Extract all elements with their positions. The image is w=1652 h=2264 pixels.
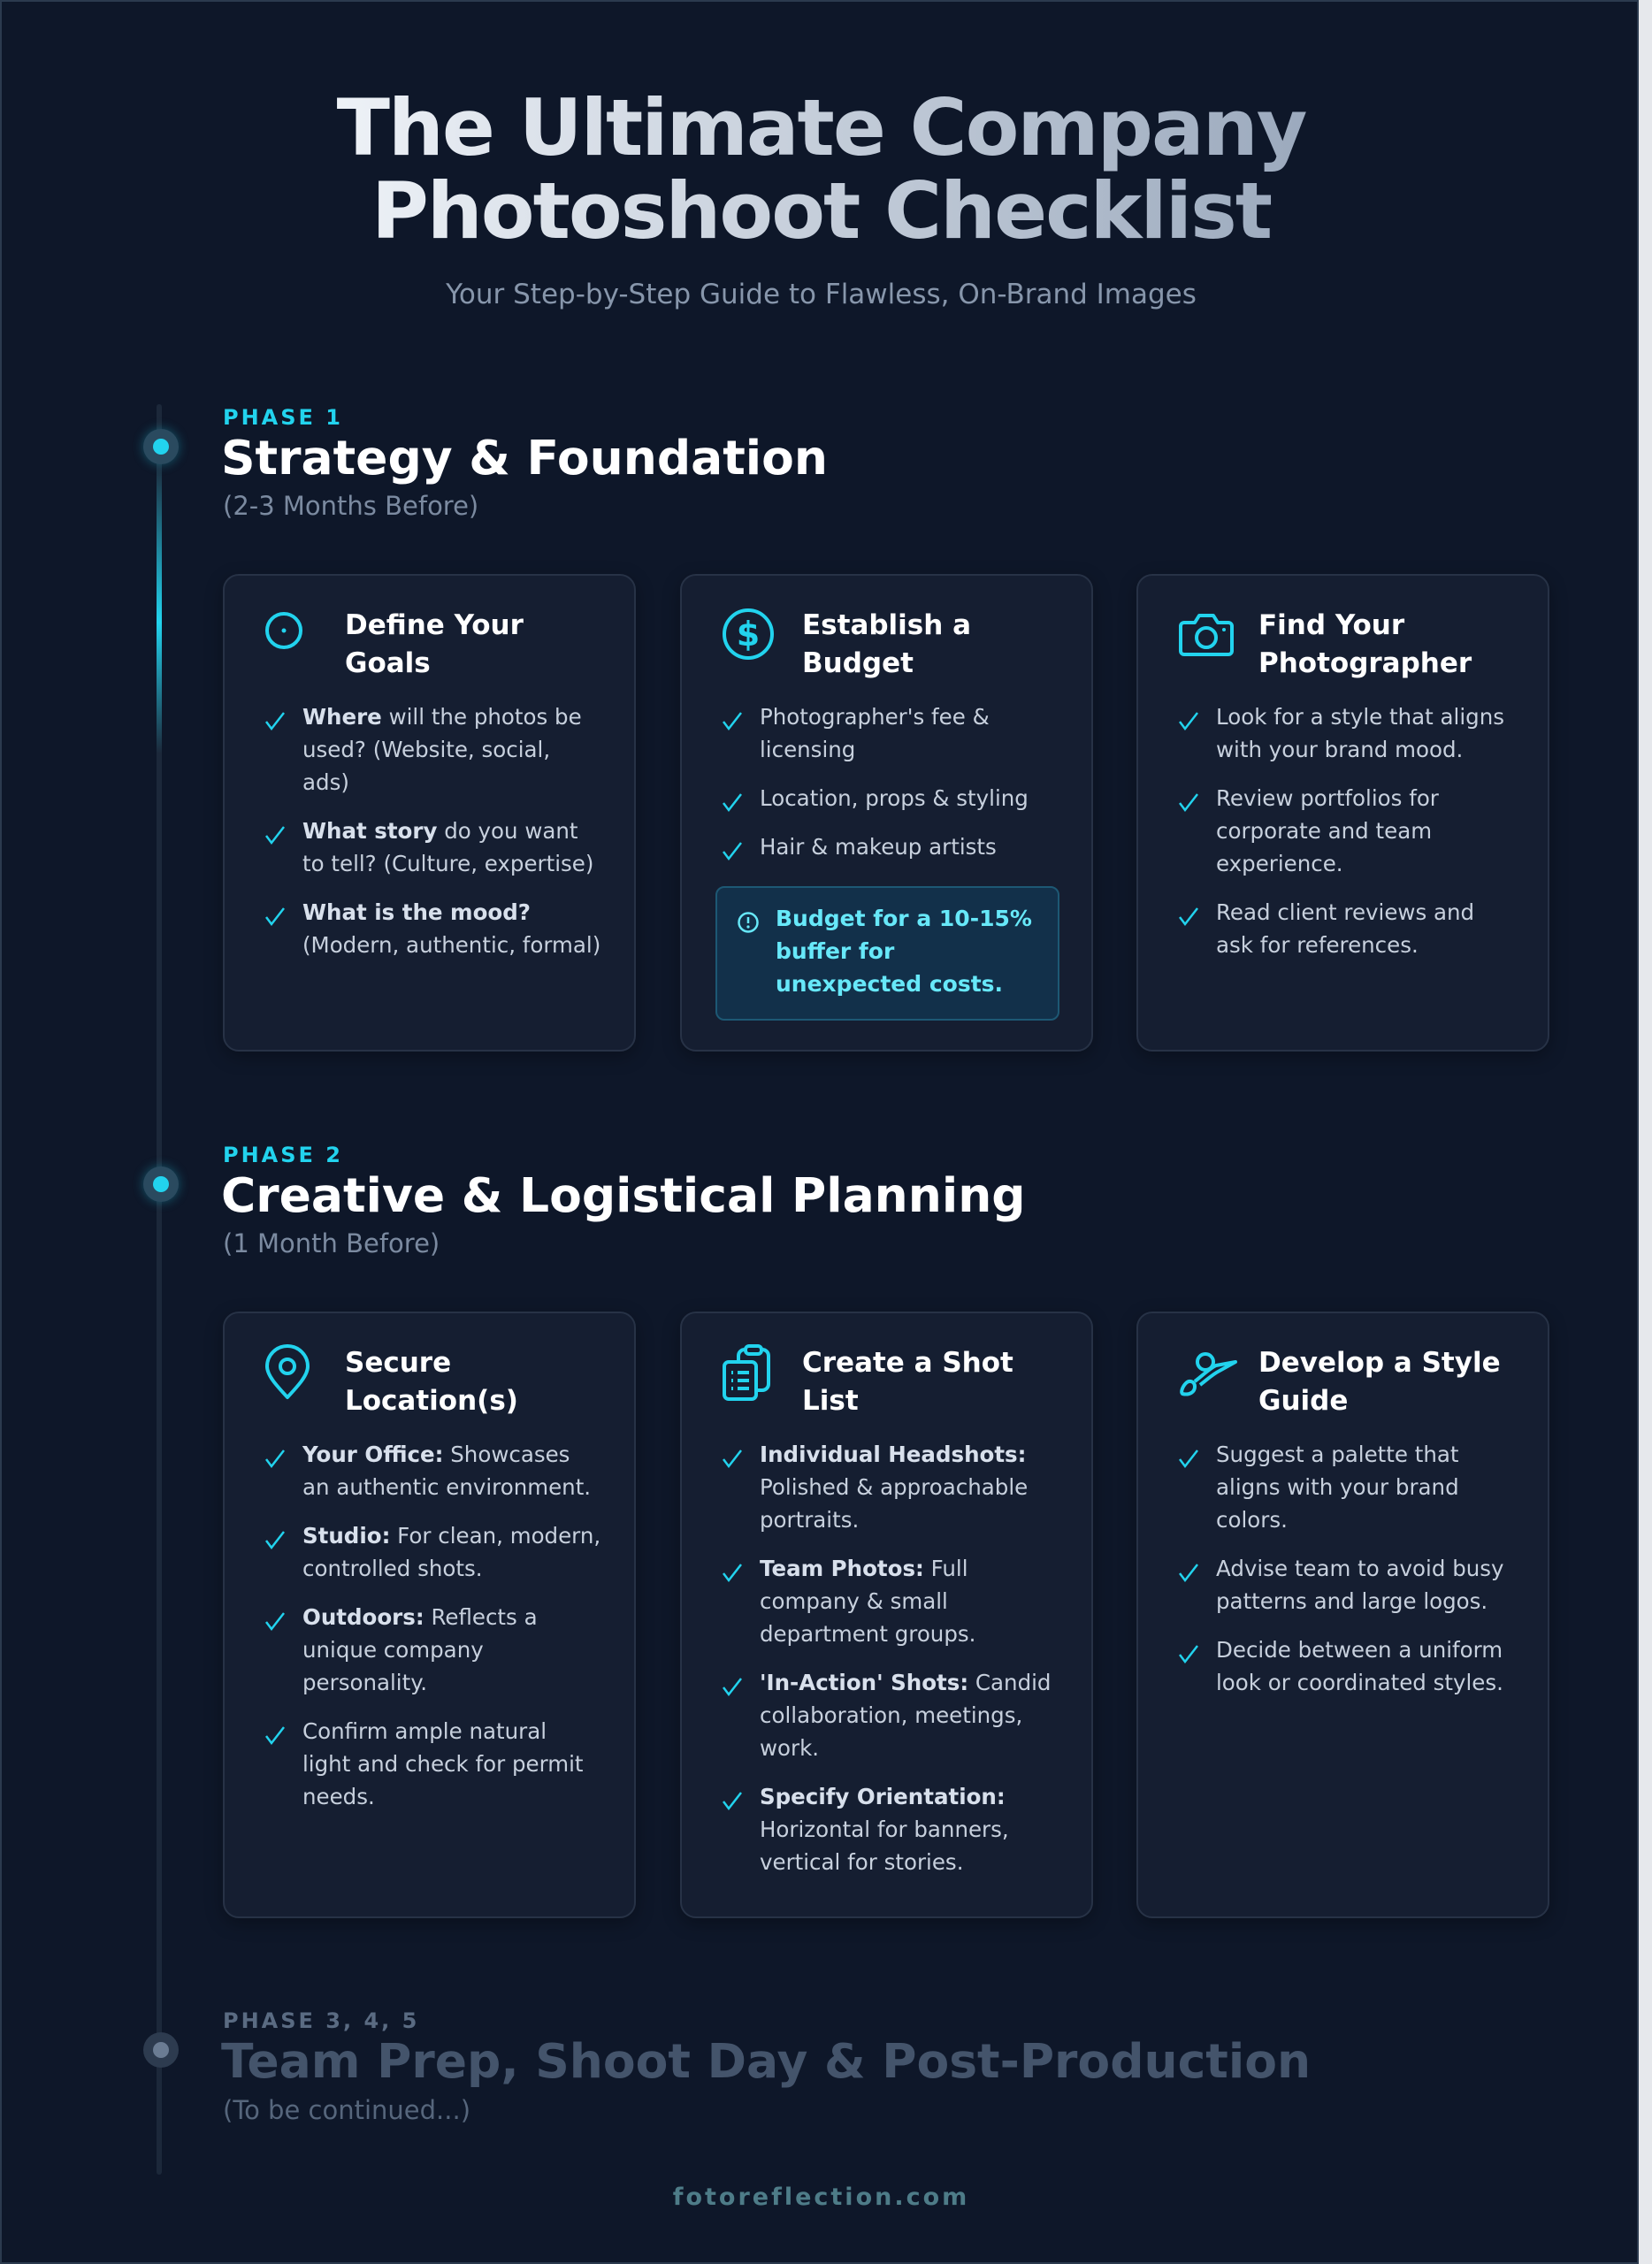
card: shot list: Specify Orientation: Horizontal for banners, vertical for stories. (760, 1784, 1009, 1875)
card: location: Studio: For clean, modern, (302, 1523, 600, 1549)
card: location: Outdoors: Reflects a (302, 1604, 538, 1630)
card: define goals: Where will the photos be (302, 704, 582, 730)
icon: camera (1179, 614, 1234, 656)
card: location (223, 1312, 636, 1918)
icon: clipboard (723, 1344, 770, 1401)
icon: target (265, 612, 302, 649)
phase 1 label: PHASE 1 (223, 405, 343, 430)
card: location: Secure (345, 1347, 451, 1379)
card: style guide: Guide (1258, 1385, 1348, 1417)
card: location: Location(s) (345, 1385, 518, 1417)
card: budget: Photographer's fee & licensing (760, 704, 990, 762)
phase 2 timing: (1 Month Before) (223, 1228, 440, 1258)
card: location: needs. (302, 1784, 375, 1809)
timeline dot phase 1 (143, 429, 179, 464)
timeline dot phase 2 (143, 1166, 179, 1202)
phase 2 heading: Creative & Logistical Planning (221, 1167, 1026, 1223)
card: define goals: ads) (302, 769, 349, 795)
icon: dollar (723, 608, 774, 660)
card: location: Your Office: Showcases (302, 1442, 570, 1467)
timeline highlight (157, 462, 162, 753)
phase 1 heading: Strategy & Foundation (221, 430, 828, 486)
icon: map pin (265, 1344, 310, 1399)
card: budget: Location, props & styling (760, 785, 1029, 811)
title: The Ultimate Company (337, 82, 1305, 173)
card: define goals: to tell? (Culture, expertise) (302, 851, 593, 876)
card: style guide: Decide between a uniform look or coordinated styles. (1216, 1637, 1503, 1695)
card: define goals: What is the mood? (302, 899, 531, 925)
timeline line (157, 404, 162, 2175)
card: photographer: Look for a style that aligns with your brand mood. (1216, 704, 1504, 762)
card: shot list: Team Photos: Full company & small department groups. (760, 1556, 975, 1647)
phase 1 timing: (2-3 Months Before) (223, 491, 478, 521)
card: define goals (223, 574, 636, 1052)
phase 3-5 label: PHASE 3, 4, 5 (223, 2008, 419, 2033)
card: style guide: Develop a Style (1258, 1347, 1501, 1379)
card: budget: Hair & makeup artists (760, 834, 997, 860)
card: photographer: Review portfolios for corporate and team experience. (1216, 785, 1439, 876)
icon: dollar: $ (737, 615, 760, 654)
card: shot list: Individual Headshots: Polished & approachable portraits. (760, 1442, 1028, 1533)
card: shot list: List (802, 1385, 859, 1417)
card: style guide: Advise team to avoid busy patterns and large logos. (1216, 1556, 1504, 1614)
card: budget: Establish a (802, 609, 971, 641)
callout: budget buffer: Budget for a 10-15% buffer for unexpected costs. (776, 906, 1032, 997)
card: shot list (680, 1312, 1093, 1918)
card: photographer: Read client reviews and ask for references. (1216, 899, 1474, 958)
card: define goals: Define Your (345, 609, 524, 641)
phase 3-5 timing: (To be continued...) (223, 2095, 470, 2125)
title (2, 87, 1641, 253)
card: define goals: Goals (345, 647, 431, 679)
card: location: unique company (302, 1637, 484, 1663)
card: define goals: used? (Website, social, (302, 737, 550, 762)
card: style guide: Suggest a palette that aligns with your brand colors. (1216, 1442, 1459, 1533)
subtitle: Your Step-by-Step Guide to Flawless, On-Brand Images (446, 279, 1197, 310)
card: photographer: Find Your (1258, 609, 1404, 641)
card: style guide (1136, 1312, 1549, 1918)
card: location: an authentic environment. (302, 1474, 591, 1500)
card: location: Confirm ample natural (302, 1718, 547, 1744)
card: photographer (1136, 574, 1549, 1052)
card: location: light and check for permit (302, 1751, 584, 1777)
footer: fotoreflection.com (673, 2184, 969, 2211)
callout: budget buffer (715, 886, 1059, 1021)
timeline dot phase 3 (143, 2032, 179, 2068)
card: shot list: Create a Shot (802, 1347, 1013, 1379)
card: budget (680, 574, 1093, 1052)
title: Photoshoot Checklist (371, 165, 1271, 256)
card: define goals: What story do you want (302, 818, 578, 844)
icon: brush (1180, 1352, 1237, 1396)
card: define goals: (Modern, authentic, formal) (302, 932, 600, 958)
card: photographer: Photographer (1258, 647, 1472, 679)
phase 3-5 heading: Team Prep, Shoot Day & Post-Production (221, 2033, 1311, 2089)
card: budget: Budget (802, 647, 914, 679)
phase 2 label: PHASE 2 (223, 1143, 343, 1167)
card: location: controlled shots. (302, 1556, 483, 1581)
card: shot list: 'In-Action' Shots: Candid collaboration, meetings, work. (760, 1670, 1051, 1761)
card: location: personality. (302, 1670, 427, 1695)
